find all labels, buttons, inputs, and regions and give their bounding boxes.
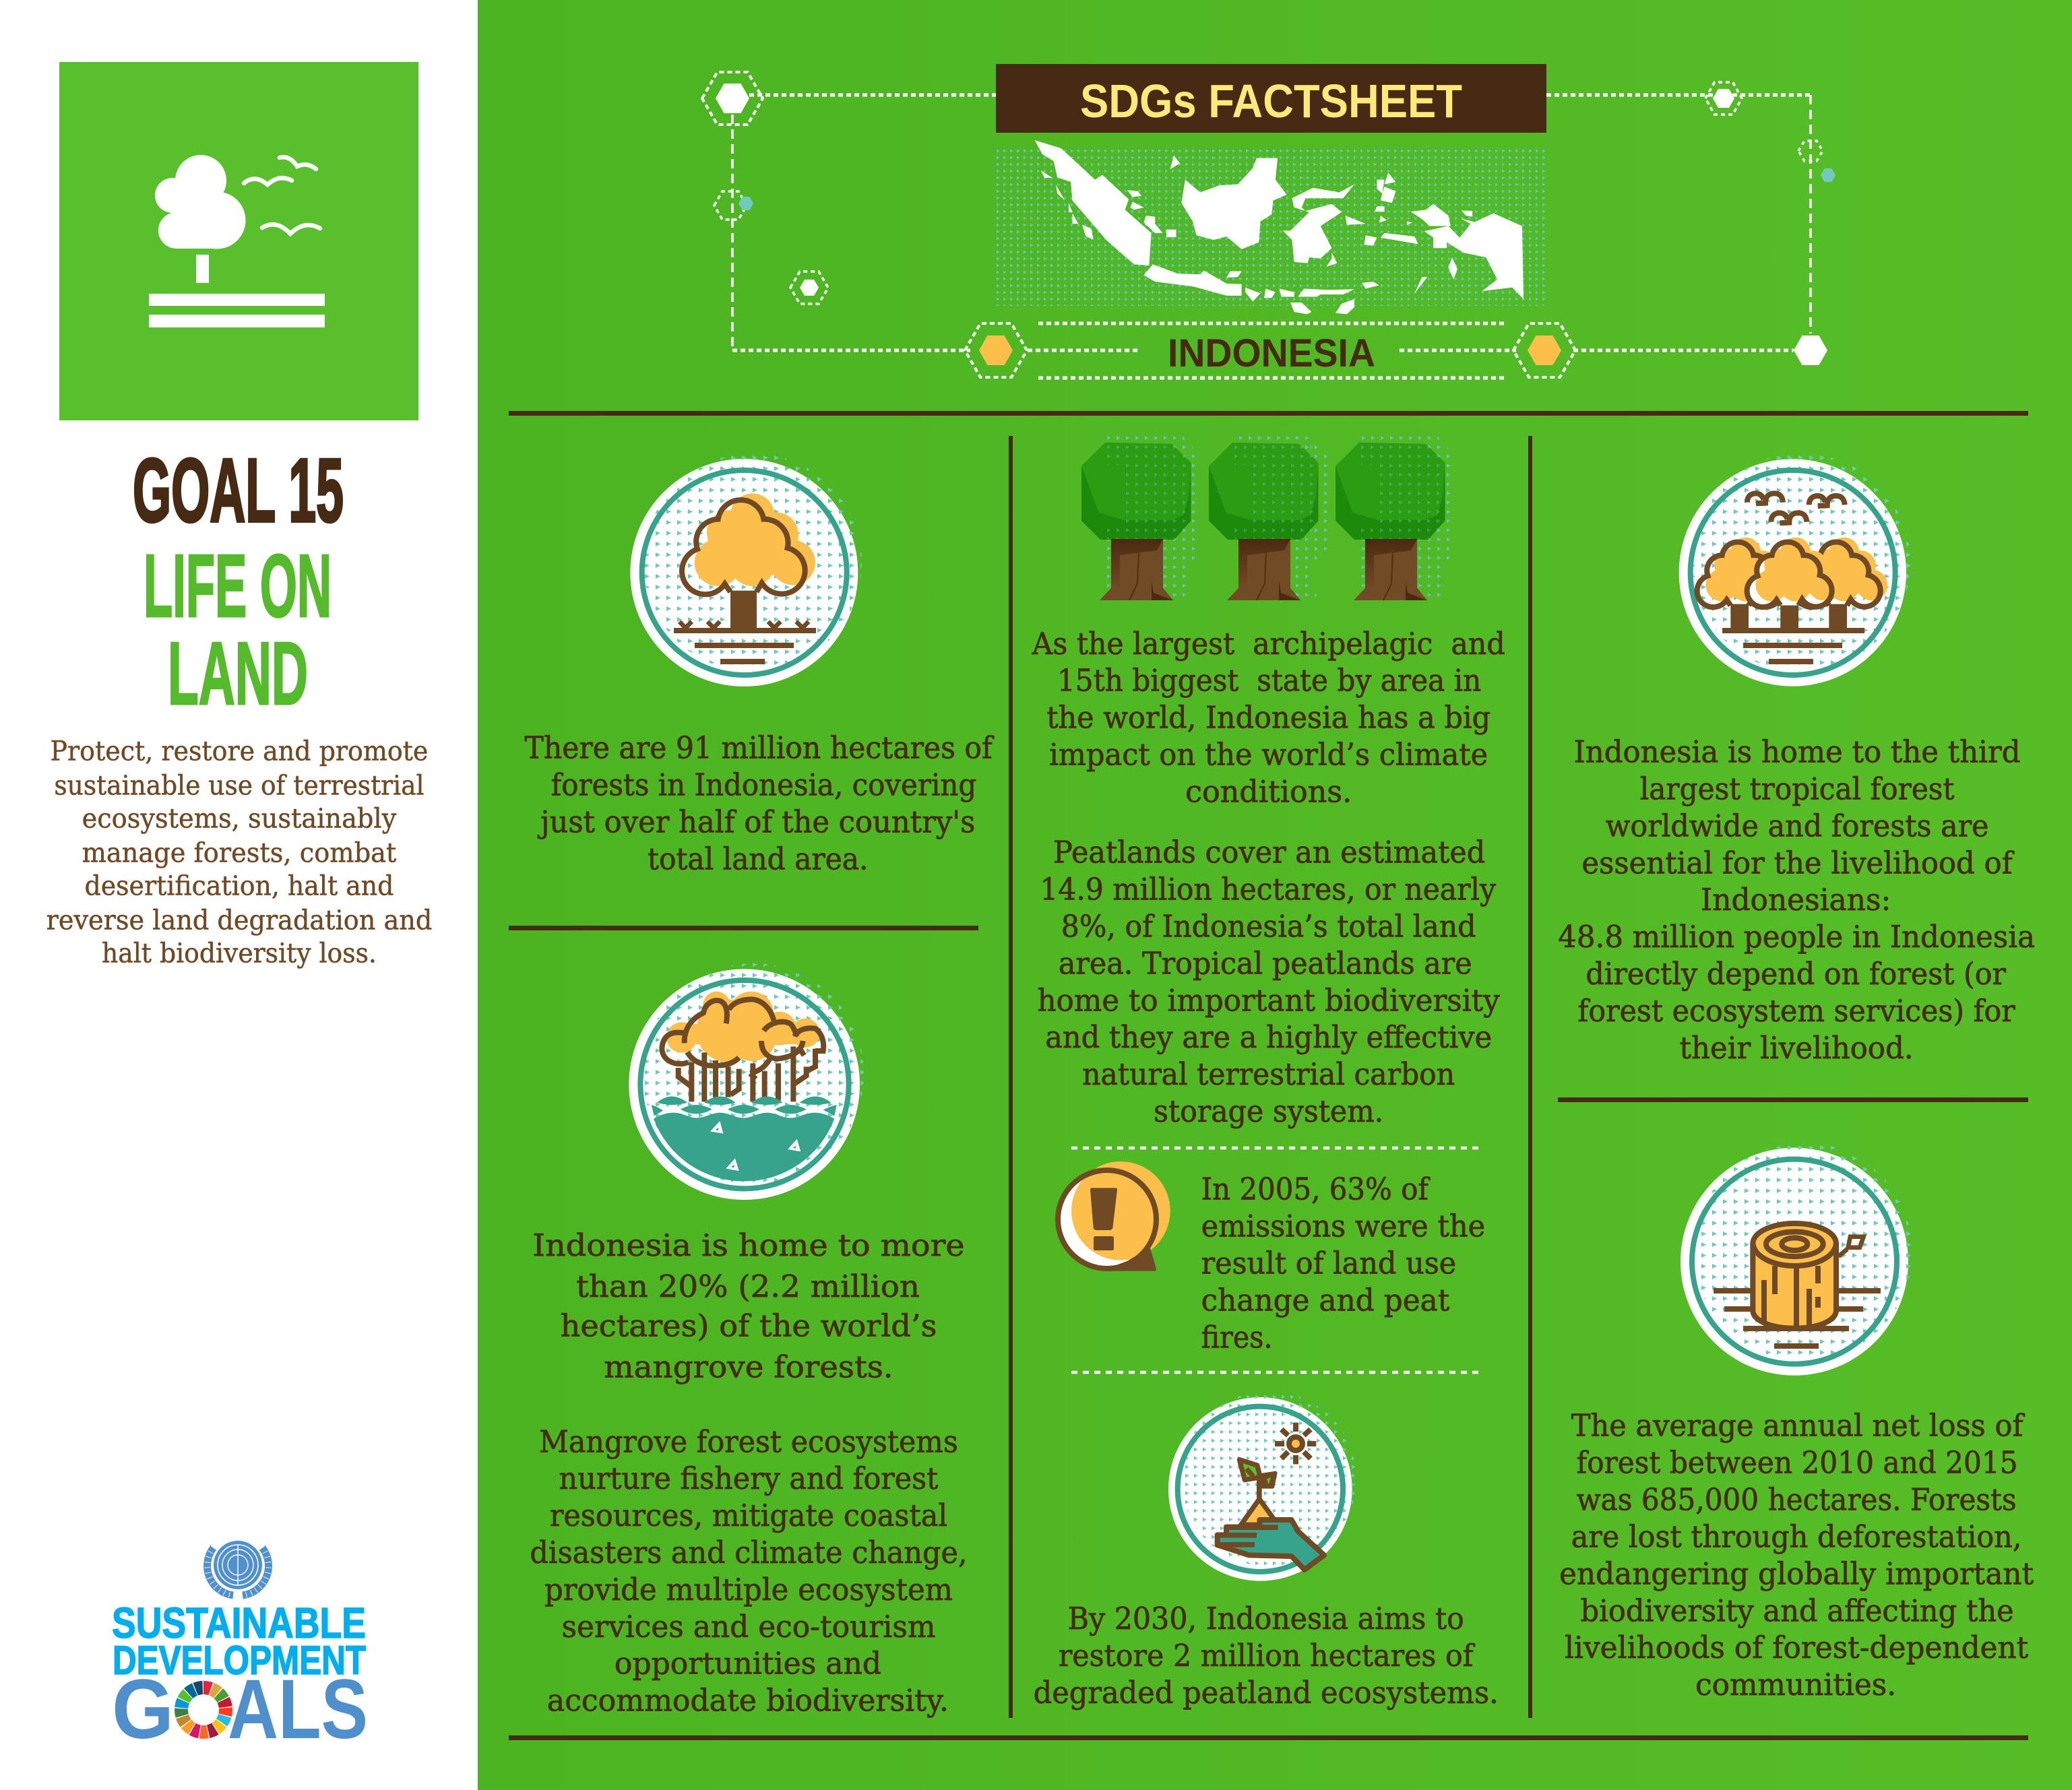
text block: annual forest loss: biodiversity and affecting the: [1580, 1593, 2014, 1628]
water: [652, 1096, 837, 1182]
text block: goal description: [46, 736, 432, 969]
text block: peatlands: area. Tropical peatlands are: [1059, 945, 1472, 981]
text block: mangrove ecosystems: [530, 1424, 968, 1719]
text block: peatlands: natural terrestrial carbon: [1082, 1056, 1455, 1092]
text block: goal description: desertification, halt and: [85, 871, 394, 902]
text block: third largest tropical forest: Indonesia is home to the third: [1574, 734, 2021, 770]
text block: goal description: manage forests, combat: [82, 838, 396, 869]
text block: annual forest loss: communities.: [1695, 1667, 1896, 1702]
logo: sustainable development goals: SUSTAINABLE: [112, 1599, 366, 1647]
text block: annual forest loss: forest between 2010 and 2015: [1577, 1445, 2018, 1481]
text block: annual forest loss: livelihoods of forest-dependent: [1565, 1630, 2028, 1665]
label: Indonesia: INDONESIA: [1168, 331, 1375, 375]
text block: restoration target: restore 2 million hectares of: [1059, 1638, 1476, 1673]
banner: sdgs factsheet title: SDGs FACTSHEET: [1080, 75, 1462, 127]
map: dotted background: [996, 148, 1546, 306]
text block: emissions: result of land use: [1201, 1246, 1456, 1281]
text block: emissions: fires.: [1201, 1319, 1273, 1355]
text block: third largest tropical forest: 48.8 million people in Indonesia: [1558, 919, 2035, 955]
icon: single tree badge: [630, 453, 862, 686]
text block: mangrove ecosystems: opportunities and: [615, 1646, 881, 1682]
text block: mangrove ecosystems: accommodate biodiversity.: [547, 1683, 949, 1719]
icon: tree stump badge: [1681, 1143, 1912, 1376]
text block: third largest tropical forest: essential for the livelihood of: [1581, 845, 2015, 881]
text block: peatlands: 8%, of Indonesia’s total land: [1061, 908, 1476, 944]
text block: annual forest loss: are lost through deforestation,: [1571, 1519, 2021, 1554]
text block: restoration target: By 2030, Indonesia aims to: [1068, 1601, 1464, 1636]
text block: peatlands: and they are a highly effective: [1045, 1019, 1492, 1055]
text block: archipelagic state: 15th biggest state by area in: [1057, 663, 1481, 699]
text block: mangrove ecosystems: nurture fishery and forest: [559, 1461, 938, 1496]
heading: life on land: LAND: [168, 624, 308, 723]
logo: sustainable development goals: DEVELOPMENT: [113, 1638, 366, 1683]
text block: archipelagic state: impact on the world’s climate: [1049, 737, 1488, 773]
text block: goal description: halt biodiversity loss.: [102, 938, 377, 969]
text block: goal description: ecosystems, sustainably: [82, 804, 397, 835]
text block: restoration target: [1034, 1601, 1499, 1711]
text block: mangrove share: hectares) of the world’s: [561, 1308, 937, 1344]
text block: peatlands: home to important biodiversity: [1037, 982, 1500, 1018]
panel: left column: [525, 453, 995, 1719]
text block: forest area: [525, 730, 995, 876]
icon: three trees: [1081, 436, 1456, 602]
panel: header factsheet frame: [702, 64, 1835, 378]
logo: sustainable development goals: [112, 1541, 368, 1756]
text block: third largest tropical forest: their livelihood.: [1680, 1030, 1914, 1066]
icon: mangrove badge: [629, 963, 864, 1200]
panel: middle column: [1032, 436, 1505, 1711]
text block: emissions: change and peat: [1201, 1282, 1449, 1318]
text block: emissions: emissions were the: [1201, 1209, 1485, 1244]
text block: forest area: just over half of the country's: [537, 804, 975, 840]
text block: goal description: reverse land degradation and: [46, 905, 432, 936]
text block: peatlands: [1037, 835, 1500, 1129]
text block: third largest tropical forest: largest tropical forest: [1640, 771, 1954, 807]
heading: goal 15: GOAL 15: [133, 441, 344, 541]
text block: emissions: In 2005, 63% of: [1201, 1172, 1431, 1207]
text block: archipelagic state: conditions.: [1185, 773, 1352, 809]
background: green main panel: [478, 0, 2072, 1790]
text block: third largest tropical forest: worldwide and forests are: [1606, 808, 1988, 843]
icon: seedling in hand badge: [1168, 1391, 1356, 1581]
icon: goal 15 tile: [59, 62, 418, 420]
text block: mangrove share: than 20% (2.2 million: [576, 1269, 920, 1304]
text block: third largest tropical forest: forest ecosystem services) for: [1578, 993, 2015, 1029]
text block: peatlands: 14.9 million hectares, or nearly: [1040, 872, 1496, 907]
text block: restoration target: degraded peatland ecosystems.: [1034, 1675, 1499, 1711]
text block: annual forest loss: endangering globally important: [1559, 1556, 2034, 1591]
banner: sdgs factsheet title: [996, 64, 1546, 133]
text block: third largest tropical forest: [1558, 734, 2035, 1066]
heading: life on land: LIFE ON: [144, 536, 332, 635]
icon: UN emblem: [207, 1541, 269, 1595]
text block: peatlands: storage system.: [1154, 1093, 1383, 1129]
connector lines: dashed frame: [732, 95, 1811, 378]
logo: sustainable development goals: ALS: [228, 1663, 368, 1756]
panel: right column: [1558, 453, 2035, 1702]
text block: mangrove ecosystems: provide multiple ecosystem: [544, 1572, 953, 1607]
text block: mangrove ecosystems: resources, mitigate coastal: [550, 1498, 947, 1533]
text block: forest area: total land area.: [648, 841, 868, 876]
text block: mangrove share: Indonesia is home to more: [532, 1227, 965, 1263]
icon: three trees and birds badge: [1679, 453, 1910, 686]
text block: mangrove ecosystems: services and eco-tourism: [561, 1609, 935, 1644]
text block: annual forest loss: The average annual net loss of: [1571, 1408, 2026, 1444]
text block: archipelagic state: As the largest archipelagic and: [1032, 626, 1505, 662]
text block: annual forest loss: was 685,000 hectares. Forests: [1577, 1482, 2017, 1518]
text block: annual forest loss: [1559, 1408, 2034, 1702]
text block: peatlands: Peatlands cover an estimated: [1053, 835, 1485, 870]
icon: SDG colour wheel: [181, 1688, 226, 1732]
text block: mangrove share: mangrove forests.: [604, 1349, 893, 1384]
decorations: hexagon nodes: [702, 72, 1835, 377]
icon: alert speech bubble: [1058, 1161, 1170, 1271]
text block: forest area: There are 91 million hectares of: [525, 730, 995, 766]
text block: goal description: sustainable use of terrestrial: [54, 771, 425, 802]
text block: third largest tropical forest: Indonesians:: [1701, 882, 1891, 918]
text block: goal description: Protect, restore and promote: [51, 736, 428, 767]
text block: mangrove ecosystems: Mangrove forest ecosystems: [539, 1424, 958, 1459]
text block: emissions: [1201, 1172, 1485, 1355]
map: Indonesia archipelago: [1035, 140, 1524, 314]
text block: mangrove ecosystems: disasters and climate change,: [530, 1535, 968, 1570]
text block: third largest tropical forest: directly depend on forest (or: [1586, 956, 2006, 992]
dividers: column and row rules: [509, 411, 2028, 1740]
text block: archipelagic state: the world, Indonesia has a big: [1046, 700, 1490, 736]
text block: mangrove share: [532, 1227, 965, 1384]
text block: archipelagic state: [1032, 626, 1505, 809]
panel: left goal sidebar: [46, 62, 432, 1756]
logo: sustainable development goals: G: [112, 1663, 174, 1756]
heading: life on land: [144, 536, 332, 723]
text block: forest area: forests in Indonesia, covering: [551, 767, 976, 803]
